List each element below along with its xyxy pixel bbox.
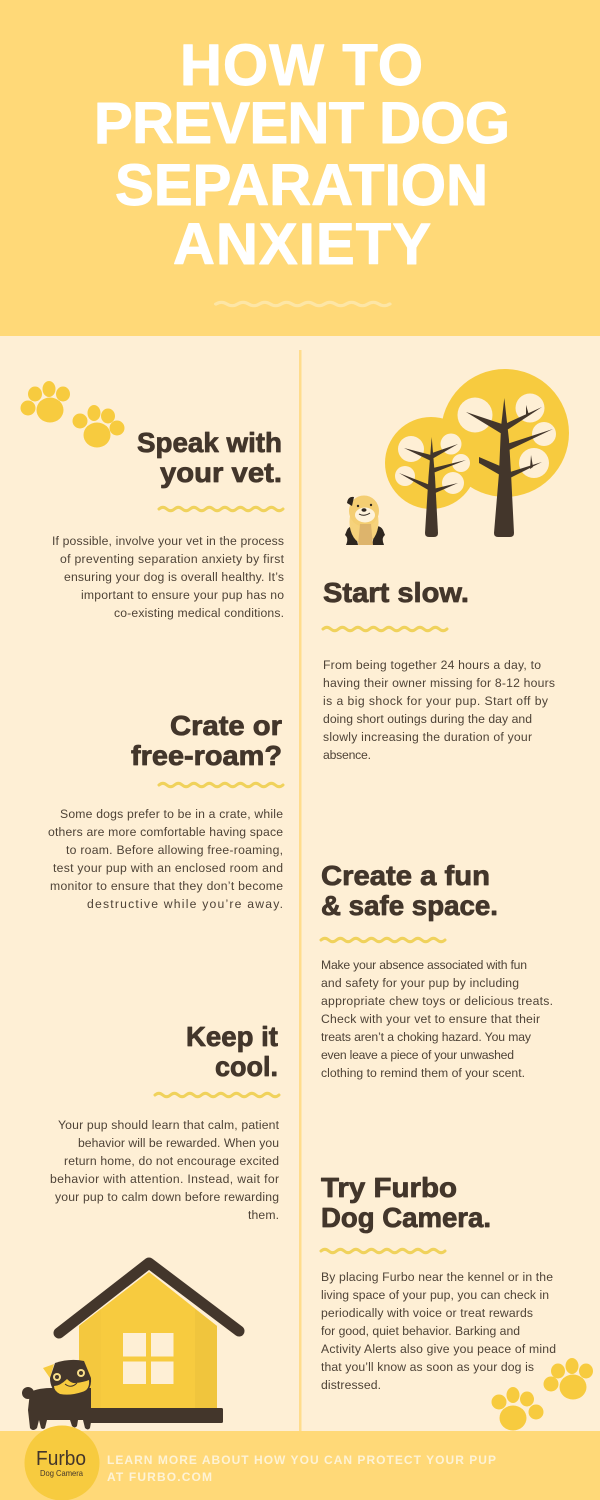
text: keep it cool — [50, 1118, 280, 1222]
heading: keep it cool — [186, 1021, 278, 1082]
text: speak with your vet: co-existing medical conditions. — [114, 606, 284, 620]
panel: crate or free-roam — [48, 710, 283, 911]
text: try furbo dog camera: Activity Alerts also give you peace of mind — [321, 1342, 556, 1356]
furbo logo badge — [24, 1426, 100, 1500]
text: start slow: doing short outings during the day and — [323, 712, 532, 726]
heading: speak with your vet: your vet. — [160, 457, 282, 488]
text: create a fun and safe space: treats aren’t a choking hazard. You may — [321, 1030, 532, 1044]
heading: create a fun and safe space — [321, 860, 498, 921]
text: keep it cool: Your pup should learn that calm, patient — [58, 1118, 280, 1132]
panel: start slow — [323, 577, 555, 762]
text: crate or free-roam: to roam. Before allowing free-roaming, — [66, 843, 283, 857]
header panel — [0, 0, 600, 336]
text: try furbo dog camera: for good, quiet behavior. Barking and — [321, 1324, 520, 1338]
title: HOW TO — [180, 33, 423, 98]
text: start slow: slowly increasing the duration of your — [323, 730, 532, 744]
icon: trees — [385, 369, 569, 537]
text: speak with your vet: ensuring your dog is overall healthy. It’s — [64, 570, 284, 584]
heading: crate or free-roam — [131, 710, 282, 771]
text: crate or free-roam: others are more comfortable having space — [48, 825, 283, 839]
text: keep it cool: your pup to calm down before rewarding — [55, 1190, 279, 1204]
title: SEPARATION — [115, 153, 488, 218]
heading: speak with your vet — [137, 427, 282, 488]
footer call to action — [107, 1453, 496, 1484]
text: keep it cool: them. — [248, 1208, 279, 1222]
text: crate or free-roam: test your pup with an enclosed room and — [53, 861, 283, 875]
heading: create a fun and safe space: Create a fun — [321, 860, 490, 891]
text: try furbo dog camera: By placing Furbo near the kennel or in the — [321, 1270, 553, 1284]
title: ANXIETY — [173, 212, 431, 277]
icon: paw prints bottom right — [492, 1358, 593, 1430]
text: start slow: From being together 24 hours a day, to — [323, 658, 541, 672]
furbo logo badge: Furbo — [36, 1448, 86, 1470]
text: create a fun and safe space: Check with your vet to ensure that their — [321, 1012, 540, 1026]
text: start slow: absence. — [323, 748, 371, 762]
heading: keep it cool: cool. — [215, 1051, 278, 1082]
text: try furbo dog camera: periodically with voice or treat rewards — [321, 1306, 533, 1320]
text: speak with your vet: of preventing separation anxiety by first — [60, 552, 285, 566]
panel: speak with your vet — [52, 427, 285, 620]
heading: start slow: Start slow. — [323, 577, 469, 608]
title — [94, 33, 510, 277]
text: start slow: having their owner missing for 8-12 hours — [323, 676, 555, 690]
text: try furbo dog camera — [321, 1270, 556, 1392]
icon: paw prints top left — [20, 381, 124, 448]
text: create a fun and safe space: appropriate chew toys or delicious treats. — [321, 994, 553, 1008]
furbo logo badge: Dog Camera — [40, 1468, 83, 1478]
icon: dog house — [59, 1263, 239, 1423]
title: PREVENT DOG — [94, 91, 510, 156]
heading: crate or free-roam: Crate or — [170, 710, 282, 741]
panel: create a fun and safe space — [321, 860, 553, 1080]
heading: try furbo dog camera — [321, 1172, 491, 1233]
text: speak with your vet — [52, 534, 285, 620]
heading: create a fun and safe space: & safe space. — [321, 890, 498, 921]
text: create a fun and safe space: clothing to remind them of your scent. — [321, 1066, 525, 1080]
footer call to action: LEARN MORE ABOUT HOW YOU CAN PROTECT YOUR PUP — [107, 1453, 496, 1467]
text: start slow: is a big shock for your pup. Start off by — [323, 694, 549, 708]
text: try furbo dog camera: distressed. — [321, 1378, 381, 1392]
text: crate or free-roam: destructive while you’re away. — [87, 897, 283, 911]
text: create a fun and safe space: and safety for your pup by including — [321, 976, 519, 990]
heading: keep it cool: Keep it — [186, 1021, 278, 1052]
panel: keep it cool — [50, 1021, 280, 1222]
text: create a fun and safe space — [321, 958, 553, 1080]
icon: sitting dog — [345, 496, 385, 545]
text: crate or free-roam: monitor to ensure that they don’t become — [50, 879, 283, 893]
text: crate or free-roam — [48, 807, 283, 911]
text: create a fun and safe space: Make your absence associated with fun — [321, 958, 527, 972]
title wave divider — [216, 302, 390, 306]
footer panel — [0, 1426, 600, 1500]
heading: try furbo dog camera: Dog Camera. — [321, 1202, 491, 1233]
text: speak with your vet: important to ensure your pup has no — [81, 588, 284, 602]
text: create a fun and safe space: even leave a piece of your unwashed — [321, 1048, 514, 1062]
text: keep it cool: behavior will be rewarded. When you — [78, 1136, 279, 1150]
footer call to action: AT FURBO.COM — [107, 1470, 212, 1484]
heading: speak with your vet: Speak with — [137, 427, 282, 458]
text: try furbo dog camera: living space of your pup, you can check in — [321, 1288, 549, 1302]
heading: try furbo dog camera: Try Furbo — [321, 1172, 457, 1203]
text: try furbo dog camera: that you’ll know as soon as your dog is — [321, 1360, 534, 1374]
text: keep it cool: behavior with attention. Instead, wait for — [50, 1172, 279, 1186]
icon: pug — [22, 1360, 91, 1430]
text: speak with your vet: If possible, involve your vet in the process — [52, 534, 284, 548]
text: crate or free-roam: Some dogs prefer to be in a crate, while — [60, 807, 283, 821]
panel: try furbo dog camera — [321, 1172, 556, 1392]
heading: crate or free-roam: free-roam? — [131, 740, 282, 771]
text: keep it cool: return home, do not encourage excited — [64, 1154, 279, 1168]
text: start slow — [323, 658, 555, 762]
